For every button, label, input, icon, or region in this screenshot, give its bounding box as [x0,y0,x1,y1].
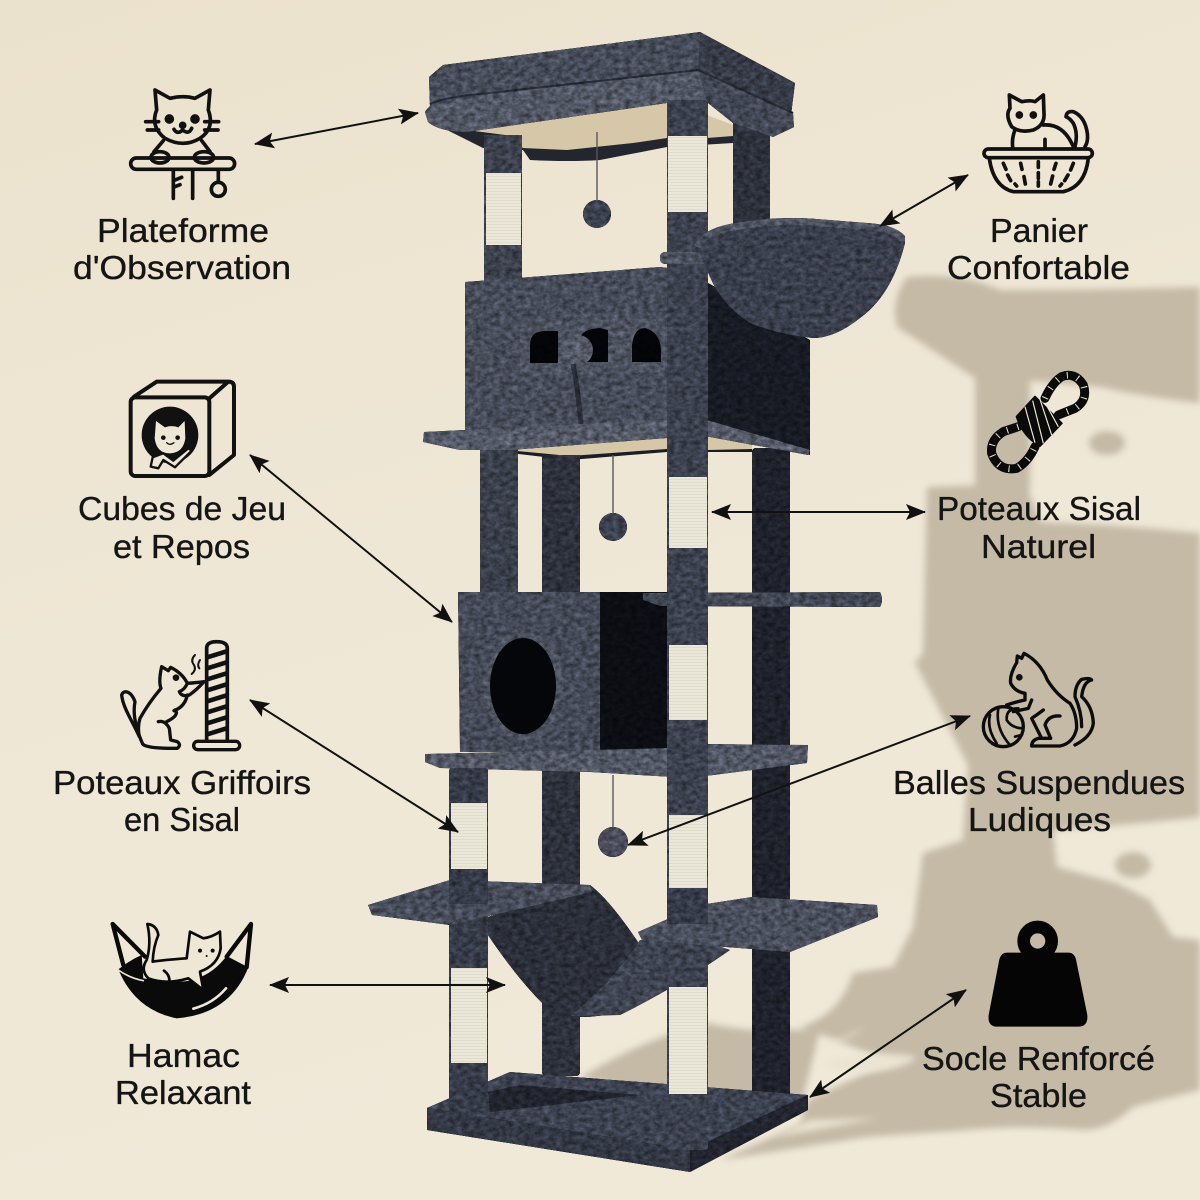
label [115,1037,251,1111]
base plate [427,1072,808,1172]
icon: weight [989,927,1087,1027]
lower house [458,592,670,752]
label: et Repos [113,528,250,565]
label [53,764,311,838]
label: Naturel [981,528,1096,565]
label: Poteaux Griffoirs [53,764,311,801]
label [73,212,291,286]
label: Panier [990,212,1088,249]
hanging ball top [583,200,611,228]
icon: cat with yarn ball [983,653,1093,747]
label [937,490,1141,565]
arrow: stable base [810,990,966,1097]
feature: Cubes de Jeu et Repos [78,382,286,565]
entrance hole rim [483,632,563,740]
icon: cat on platform [131,90,235,198]
label [947,212,1130,286]
back posts [480,122,790,1103]
entrance hole [490,638,556,734]
label: Cubes de Jeu [78,490,286,527]
cast shadow on wall and floor [580,276,1200,1160]
upper shelf [423,418,810,455]
icon: cat in hammock [113,924,251,1018]
label: Relaxant [115,1074,251,1111]
label: Balles Suspendues [893,764,1185,801]
tower plush structure [368,32,905,1172]
ball strings [597,132,613,828]
label [922,1040,1155,1114]
feature: Plateforme d'Observation [73,90,291,286]
hanging basket [697,222,905,338]
feature: Hamac Relaxant [113,924,251,1111]
upper house [465,267,810,455]
label: d'Observation [73,249,291,286]
label: Confortable [947,249,1130,286]
label: Socle Renforcé [922,1040,1155,1077]
arrow: hanging balls [628,716,970,845]
feature: Poteaux Griffoirs en Sisal [53,642,311,838]
feature: Poteaux Sisal Naturel [937,375,1141,565]
label: Plateforme [97,212,269,249]
label: Stable [990,1077,1087,1114]
arrow: play cubes [250,455,452,622]
feature: Socle Renforcé Stable [922,927,1155,1114]
label: Poteaux Sisal [937,490,1141,527]
label: en Sisal [124,801,240,838]
side perch [643,592,882,607]
arrow: scratching posts [250,700,458,832]
arrow: natural sisal posts [712,511,925,513]
left lower shelf [368,880,592,925]
label: Ludiques [968,801,1111,838]
feature: Balles Suspendues Ludiques [893,653,1185,838]
feature: Panier Confortable [947,95,1130,286]
arrow: observation platform [255,113,418,144]
top platform [425,32,795,137]
label: Hamac [127,1037,240,1074]
icon: cat in basket [984,95,1092,192]
sisal wraps [451,136,707,1094]
arrow: basket [880,175,968,226]
hammock [478,885,730,1017]
icon: cat scratching post [122,642,240,750]
cat tree tower [368,32,905,1172]
icon: cube with cat [131,382,234,476]
hanging ball bottom [598,827,628,857]
hanging ball middle [599,513,627,541]
front posts [449,100,710,1150]
label [78,490,286,565]
arrow: hammock [270,984,505,986]
right lower shelf [638,897,878,952]
middle shelf [425,744,808,778]
platform undersides [443,100,752,460]
icon: rope [991,375,1085,469]
floor light gaps [775,1026,917,1137]
label [893,764,1185,838]
post collars over shelves [449,868,708,924]
